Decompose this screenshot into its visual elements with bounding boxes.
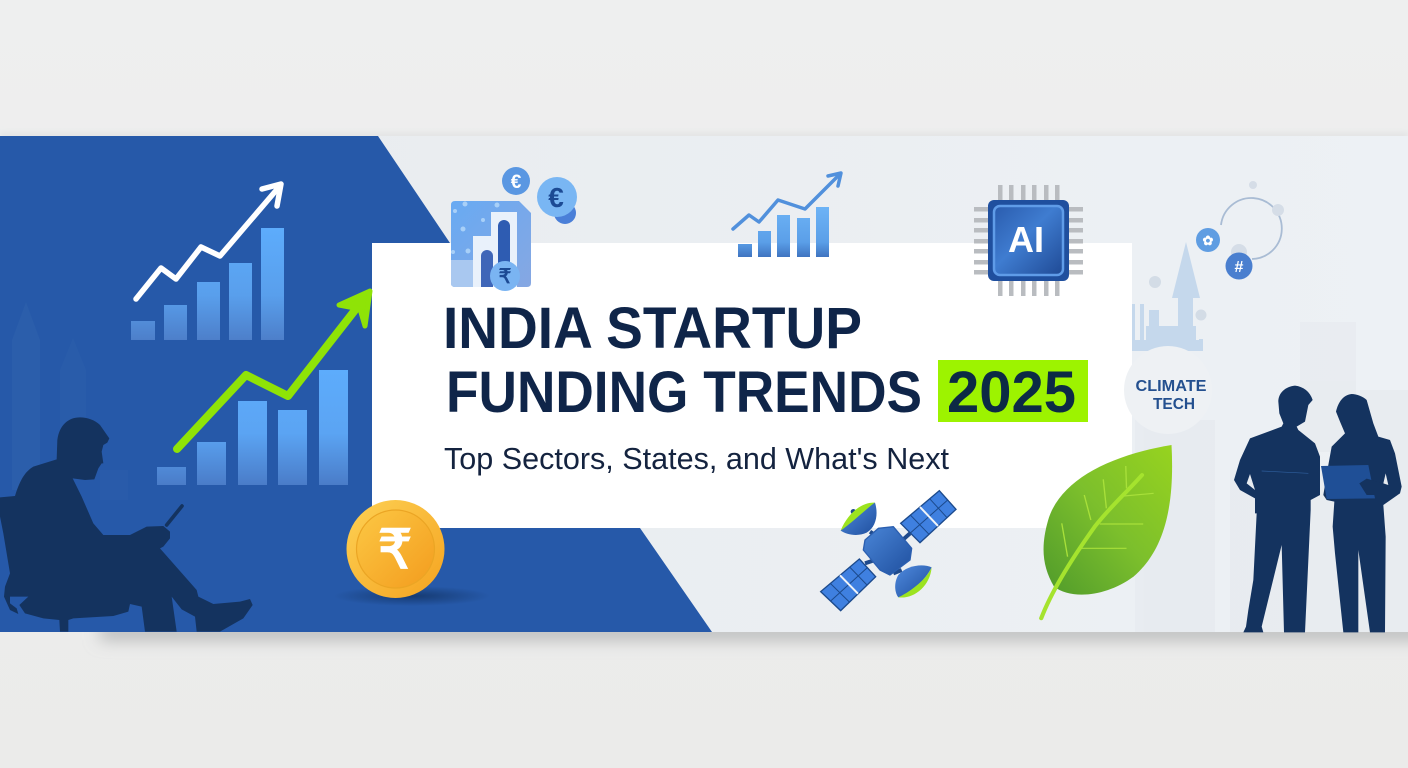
silhouette: seated man with tablet (0, 417, 253, 632)
icon: small growth chart (733, 173, 841, 257)
subtitle: Top Sectors, States, and What's Next (444, 441, 949, 476)
icon: faint arrow over skyline (1132, 242, 1206, 351)
icon: green leaf (1041, 445, 1172, 618)
faint skyline left (12, 302, 128, 500)
icon: AI chip: AI (1008, 219, 1044, 260)
icon: rupee coin: ₹ (378, 520, 412, 580)
title (443, 296, 922, 425)
icon: network ring with badges (1196, 181, 1284, 280)
icon: finance card with currency coins: ₹ (499, 266, 512, 288)
silhouette: two people with tablet (1234, 386, 1402, 632)
chart: green arrow with bars (157, 291, 370, 485)
banner (0, 136, 1408, 632)
title: INDIA STARTUP (443, 296, 862, 361)
icon: network ring with badges: ✿ (1203, 233, 1214, 248)
title: FUNDING TRENDS (446, 360, 922, 425)
icon: rupee coin (334, 500, 490, 606)
white title panel (372, 243, 1132, 528)
label: climate tech (1124, 346, 1212, 434)
label: climate tech: TECH (1153, 396, 1195, 413)
icon: network ring with badges: # (1235, 259, 1244, 276)
chart: white arrow with bars (131, 184, 284, 340)
highlighted year: 2025 (947, 360, 1076, 425)
icon: finance card with currency coins: € (548, 182, 564, 213)
icon: finance card with currency coins (451, 167, 577, 291)
icon: satellite (821, 491, 956, 611)
label: climate tech: CLIMATE (1136, 378, 1206, 395)
icon: finance card with currency coins: € (511, 172, 522, 193)
icon: AI chip (974, 185, 1083, 296)
faint city backdrop right (1135, 322, 1408, 632)
banner drop shadow (0, 133, 1408, 640)
blue diagonal panel (0, 136, 712, 632)
